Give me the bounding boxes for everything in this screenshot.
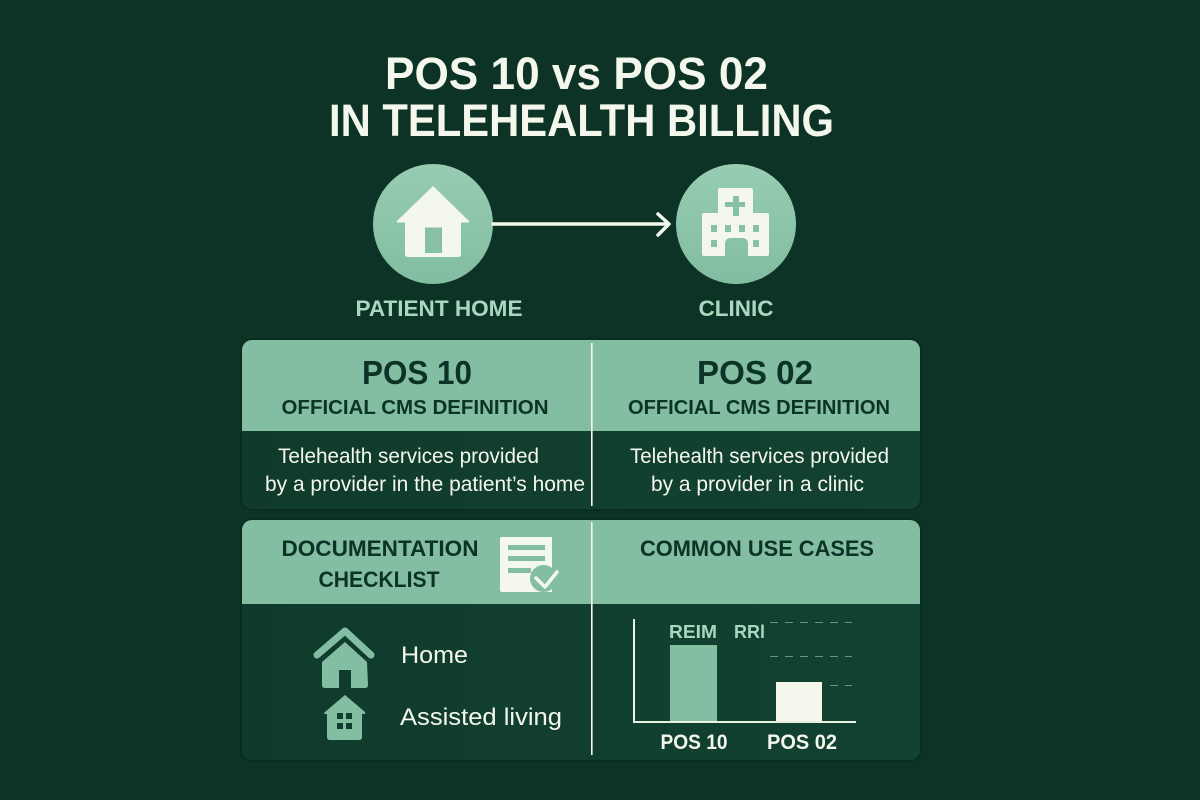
bar: POS 02 bbox=[776, 682, 822, 721]
icon: assisted living bbox=[324, 695, 365, 740]
flow diagram: patient home to clinic bbox=[356, 164, 796, 321]
text: POS 02 definition: Telehealth services provided bbox=[630, 445, 889, 468]
text: home: Home bbox=[401, 642, 468, 669]
heading: POS 02: POS 02 bbox=[697, 354, 813, 391]
heading: documentation checklist: CHECKLIST bbox=[318, 567, 440, 592]
text: POS 10 definition bbox=[265, 445, 585, 496]
text: assisted living: Assisted living bbox=[400, 704, 562, 731]
chart label: RRI: RRl bbox=[734, 622, 765, 642]
text: POS 02 definition bbox=[630, 445, 889, 496]
arrow: home to clinic bbox=[493, 214, 669, 235]
heading: POS 02 subtitle: OFFICIAL CMS DEFINITION bbox=[628, 397, 890, 419]
heading: documentation checklist bbox=[282, 536, 478, 592]
bar: POS 10 bbox=[670, 645, 717, 721]
icon: checklist document bbox=[500, 537, 557, 592]
title bbox=[329, 48, 834, 146]
panel: POS definitions bbox=[240, 338, 922, 511]
heading: common use cases: COMMON USE CASES bbox=[640, 536, 874, 561]
label: clinic: CLINIC bbox=[698, 296, 774, 321]
icon: patient home bbox=[373, 164, 493, 284]
bar chart bbox=[634, 619, 856, 754]
heading: POS 10 subtitle: OFFICIAL CMS DEFINITION bbox=[282, 397, 548, 419]
icon: home bbox=[317, 631, 371, 688]
title: POS 10 vs POS 02 bbox=[385, 48, 768, 99]
icon: clinic bbox=[676, 164, 796, 284]
axis label: POS 02: POS 02 bbox=[767, 731, 837, 754]
heading: POS 10: POS 10 bbox=[362, 354, 472, 391]
heading: documentation checklist: DOCUMENTATION bbox=[282, 536, 478, 561]
axis label: POS 10: POS 10 bbox=[660, 731, 728, 754]
title: IN TELEHEALTH BILLING bbox=[329, 95, 834, 146]
text: POS 02 definition: by a provider in a clinic bbox=[651, 473, 864, 496]
text: POS 10 definition: by a provider in the patient’s home bbox=[265, 473, 585, 496]
text: POS 10 definition: Telehealth services provided bbox=[278, 445, 539, 468]
label: patient home: PATIENT HOME bbox=[356, 296, 522, 321]
chart label: REIM: REIM bbox=[669, 622, 717, 642]
panel: checklist and use cases bbox=[240, 518, 922, 762]
